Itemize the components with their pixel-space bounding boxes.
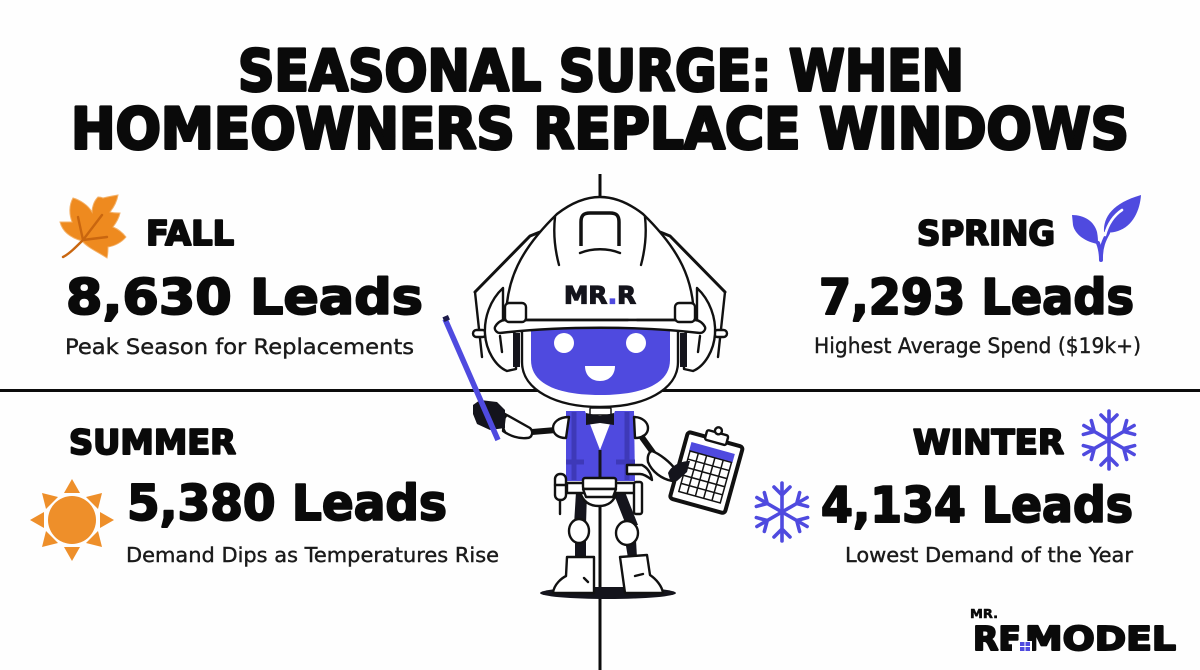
quadrant divider lines bbox=[0, 174, 1200, 670]
lead count: spring: 7,293 Leads bbox=[819, 269, 1134, 326]
season heading: fall: FALL bbox=[146, 214, 234, 254]
robot mascot bbox=[442, 197, 746, 599]
right arm bbox=[641, 436, 654, 454]
title: SEASONAL SURGE: WHEN bbox=[238, 38, 964, 104]
icon: sprout bbox=[1072, 195, 1141, 260]
caption: spring: Highest Average Spend ($19k+) bbox=[814, 334, 1141, 358]
vest and torso bbox=[566, 411, 635, 482]
caption: fall: Peak Season for Replacements bbox=[65, 335, 414, 359]
tool belt bbox=[555, 465, 652, 514]
panel: spring bbox=[814, 195, 1141, 358]
lead count: fall: 8,630 Leads bbox=[66, 269, 423, 326]
clipboard bbox=[670, 420, 746, 513]
title: HOMEOWNERS REPLACE WINDOWS bbox=[71, 96, 1129, 162]
season heading: summer: SUMMER bbox=[69, 423, 236, 463]
lead count: summer: 5,380 Leads bbox=[127, 475, 447, 532]
head and face bbox=[522, 328, 678, 407]
right forearm and hand bbox=[648, 451, 690, 481]
lead count: winter: 4,134 Leads bbox=[821, 477, 1133, 534]
ground shadow bbox=[540, 587, 676, 599]
title bbox=[71, 38, 1129, 162]
shoulders bbox=[553, 417, 648, 438]
icon: snowflake top bbox=[1080, 411, 1138, 469]
logo: Mr. Remodel: MODEL bbox=[1025, 619, 1176, 658]
caption: summer: Demand Dips as Temperatures Rise bbox=[126, 543, 499, 567]
bow tie bbox=[586, 408, 614, 425]
panel: winter bbox=[753, 411, 1138, 567]
logo: Mr. Remodel: RE bbox=[973, 619, 1021, 658]
ear muffs bbox=[473, 232, 727, 371]
panel: fall bbox=[60, 195, 423, 359]
pointer stick and left arm bbox=[442, 315, 556, 440]
season heading: spring: SPRING bbox=[917, 214, 1055, 254]
icon: snowflake left bbox=[753, 483, 811, 541]
hard hat bbox=[495, 197, 705, 333]
boots bbox=[553, 555, 663, 593]
logo: Mr. Remodel bbox=[970, 607, 1176, 658]
icon: sun bbox=[30, 479, 114, 561]
helmet logo text: MR.R bbox=[564, 282, 636, 310]
icon: maple leaf bbox=[60, 195, 126, 258]
caption: winter: Lowest Demand of the Year bbox=[845, 543, 1134, 567]
logo: Mr. Remodel: MR. bbox=[970, 607, 998, 621]
season heading: winter: WINTER bbox=[913, 423, 1064, 463]
legs bbox=[569, 492, 638, 558]
panel: summer bbox=[30, 423, 499, 567]
